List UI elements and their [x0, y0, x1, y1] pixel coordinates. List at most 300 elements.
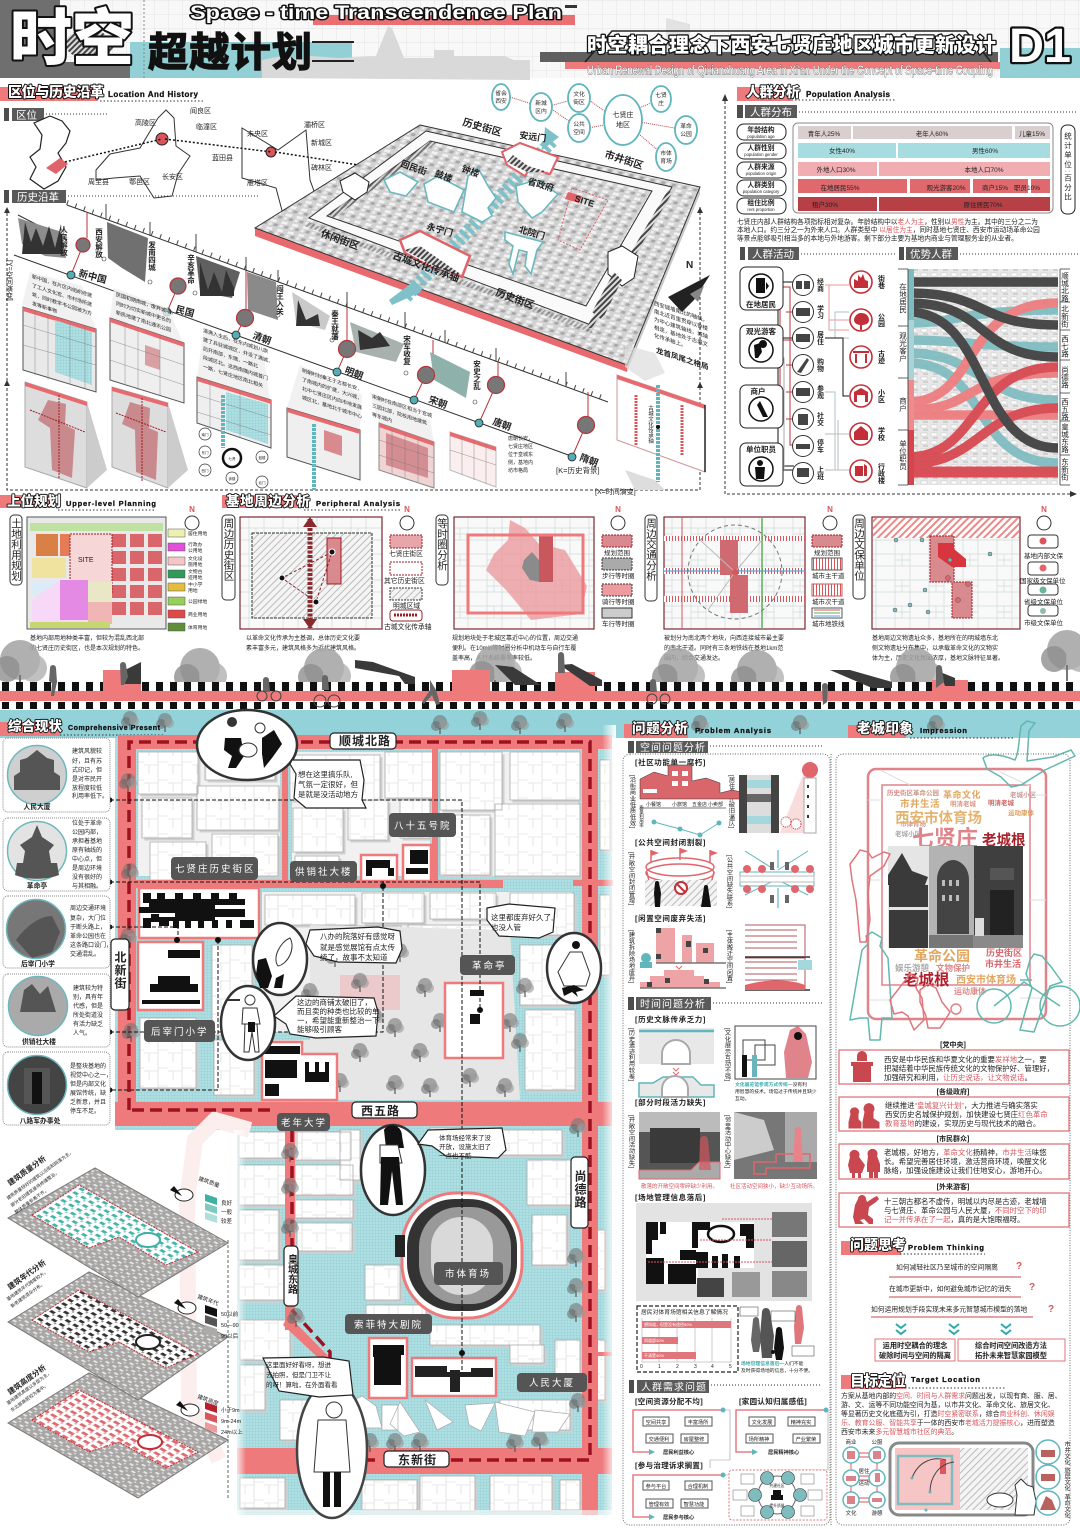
- building cards: 承担着基地: [72, 837, 102, 845]
- population labels: population age: [747, 134, 775, 139]
- section: heritage: [文化展示互动不强]: [724, 1028, 731, 1081]
- population labels: 人群来源: [747, 162, 775, 171]
- site map: 七贤庄历史街区: [175, 863, 256, 875]
- buildings: [138, 752, 610, 1511]
- park: [262, 925, 520, 1100]
- network diagram: 区内: [535, 107, 547, 115]
- function diagram: 文化: [845, 1509, 857, 1517]
- activity network: 上班: [816, 465, 824, 481]
- building cards: 别，具有年: [73, 993, 103, 1001]
- legend: heritage: 市级文保单位: [1024, 618, 1064, 627]
- heading: problem analysis: Problem Analysis: [695, 726, 771, 735]
- vertical title pills: 等时圈分析: [436, 517, 448, 571]
- layer legends: 50以前: [221, 1310, 239, 1318]
- map labels: 安远门: [519, 129, 547, 144]
- legend: historic blocks: 其它历史街区: [384, 576, 425, 585]
- subheading: activities: [740, 247, 897, 260]
- section: heritage: 互动。: [735, 1095, 749, 1102]
- stakeholder voices: [党中央]: [940, 1040, 966, 1049]
- building cards: 是整块基地的: [70, 1062, 106, 1070]
- timeline of history: 隋朝: [578, 452, 600, 469]
- layer legends: 较差: [221, 1217, 233, 1225]
- demand flows: 交通便利: [649, 1435, 669, 1443]
- outline figures: [850, 721, 1080, 1040]
- word cloud: 运动康体: [1008, 808, 1034, 817]
- land use legend: 居住用地: [188, 530, 207, 537]
- legend: historic blocks: [384, 535, 432, 631]
- pale building ground: [138, 752, 578, 1032]
- population labels: population origin: [746, 171, 777, 176]
- ring diagram: 七贤: [228, 456, 236, 461]
- heading: comprehensive present: [0, 718, 165, 736]
- chart: residents awareness: 1: [658, 1364, 661, 1370]
- tablet with word cloud: [868, 769, 1046, 1019]
- thinking questions: ?: [1016, 1261, 1022, 1272]
- activity network: 商户: [750, 386, 766, 396]
- heading: target location: [841, 1372, 1005, 1390]
- roads: [115, 735, 613, 1515]
- axis: space evolution: [4, 205, 703, 496]
- section: single function: [居住条件破旧逼仄]: [728, 775, 735, 828]
- demand flows: 丰富场所: [688, 1418, 708, 1426]
- era portraits: [71, 245, 586, 457]
- network diagram: 街区: [573, 98, 585, 106]
- vertical title pills: 土地利用规划: [10, 517, 22, 581]
- building cards: 利用率低下。: [72, 792, 108, 800]
- subheading: temporal problems: 时间问题分析: [640, 998, 706, 1010]
- note: dragon head phoenix tail: 龙首凤尾之格局: [656, 345, 709, 372]
- sankey chart: 西七路: [1060, 335, 1070, 358]
- historic map panels: 后开南部，东隅，一路北: [203, 344, 258, 370]
- axonometric layers: 部分老旧建筑亟待修缮整治，: [9, 1169, 61, 1209]
- note: dragon head phoenix tail: 化传承轴上。: [654, 331, 686, 349]
- layer legends: 建筑年代: [196, 1292, 220, 1308]
- location maps: 未央区: [247, 129, 268, 138]
- population stacked bars: 外地人口30%: [816, 165, 856, 174]
- site map: 革命亭: [472, 960, 507, 972]
- location maps: [30, 106, 365, 218]
- word cloud: 革命文化: [943, 789, 981, 800]
- building cards: 所处街道没: [73, 1011, 103, 1019]
- heading: problem thinking: 问题思考: [850, 1237, 906, 1253]
- stakeholder voices: 与七贤庄、革命公园与人民大厦，不同时空下的印: [884, 1206, 1047, 1215]
- stakeholder voices: 加强研究和利用，让历史说话，让文物说话。: [884, 1073, 1032, 1082]
- thinking questions: 如何减轻社区乃至城市的空间隔离: [896, 1262, 998, 1272]
- building cards: 展馆传统，缺: [70, 1089, 106, 1097]
- function diagram: [843, 1438, 885, 1517]
- activity network: [740, 267, 885, 486]
- sheet number: D1: [1009, 20, 1071, 73]
- target description: 乐、教育公服、智能共享于一体的西安市老城活力提振核心，进而塑造: [841, 1418, 1055, 1427]
- legend: heritage: 基地内部文保: [1024, 551, 1064, 560]
- network diagram: 七贤: [655, 91, 667, 99]
- land use legend: 文物古: [188, 568, 203, 575]
- stakeholder voices: [市民群众]: [937, 1134, 969, 1143]
- photo circles: [6, 746, 68, 1114]
- heading: peripheral analysis: 基地周边分析: [226, 493, 310, 509]
- network diagram: 公园: [680, 131, 692, 138]
- network diagram: 市体: [660, 149, 672, 157]
- section: closed public space: [开敞空间封闭管理]: [628, 852, 635, 905]
- ring diagram: 鼓楼: [258, 455, 266, 460]
- chart: residents awareness: 4: [711, 1364, 714, 1370]
- land use legend: 迹用地: [188, 574, 203, 581]
- background trees: [0, 630, 1080, 701]
- building cards: 八路军办事处: [20, 1116, 61, 1125]
- function diagram: 公服: [871, 1439, 883, 1446]
- subheading: distribution: 人群分布: [750, 106, 792, 118]
- stakeholder voices: 十三朝古都名不虚传，明城以内尽是古迹，老城墙: [884, 1197, 1047, 1206]
- panel: old town impression: [831, 720, 1080, 1525]
- target description: 方案从基地内部的空间、时间与人群需求问题出发，以现有商、服、居、: [841, 1391, 1062, 1400]
- building cards: 没有很好的: [72, 873, 102, 881]
- chart: residents awareness: 3: [694, 1364, 697, 1370]
- section: closed public space: [公共空间缺失联系]: [726, 855, 733, 908]
- building cards: 中心点，但: [72, 855, 102, 863]
- timeline of history: 宋军收复: [402, 334, 412, 366]
- site map: 能够吸引顾客: [297, 1024, 342, 1034]
- historic buildings highlighted: [138, 845, 503, 1100]
- section: idle time: 社区活动空间狭小，缺少互动场所。: [730, 1182, 818, 1190]
- legend: heritage: 国家级文保单位: [1020, 576, 1066, 585]
- people figures: [740, 1305, 814, 1374]
- population stacked bars: 男性60%: [972, 146, 998, 155]
- word cloud: 七贤庄: [912, 826, 978, 851]
- land use legend: 施用地: [188, 561, 203, 568]
- function diagram: 商业: [845, 1438, 857, 1446]
- population stacked bars: 观光游客20%: [926, 183, 966, 192]
- historic map panels: 同时为切实新城中更名的: [116, 299, 171, 325]
- map labels: 北院门: [517, 223, 546, 241]
- heading: impression: 老城印象: [857, 720, 914, 736]
- map captions: 侧文物遗址分布集中，以承载革命文化的文物实: [872, 644, 998, 652]
- map: transport: [664, 517, 805, 629]
- section: single function: [628, 757, 818, 838]
- target description: 游、文、运等不同功能空间为基，以市井文化、革命文化、旅居文化、: [841, 1400, 1055, 1409]
- stakeholder voices: 长。希望完善居住环境，激活营商环境，唤醒文化: [884, 1157, 1047, 1166]
- section: idle space: [主体搬迁空间闲置]: [726, 930, 733, 983]
- heading: upper level planning: [0, 493, 156, 510]
- building cards: 与其相融。: [72, 882, 102, 890]
- section: idle time: [628, 1097, 818, 1190]
- subheading: location: 区位: [16, 108, 37, 122]
- compass: [668, 260, 710, 312]
- person: waiter: [221, 986, 275, 1060]
- demand flows: 场所精神: [749, 1435, 769, 1443]
- building cards: 周边交通环境: [70, 904, 106, 912]
- historic map panels: 宋朝时在南部区相当于宫城: [372, 392, 432, 419]
- site map: 八十五号院: [394, 820, 452, 832]
- historic map panels: 清满入主后，在东内城划八旗: [203, 326, 268, 355]
- activity network: 街巷: [878, 274, 885, 289]
- land use legend: [168, 529, 207, 631]
- network diagram: 空间: [573, 128, 585, 136]
- place name labels: [144, 813, 587, 1392]
- stakeholder voices: 教育基地的建设，实现历史与现代技术的融合。: [885, 1119, 1040, 1128]
- map captions: 以革命文化传承为主基调，总体历史文化要: [246, 634, 360, 642]
- actor boxes: [740, 267, 783, 486]
- activity network: 购物: [816, 357, 824, 373]
- section: single function: [沿街商业低质低效]: [628, 775, 636, 828]
- people figures: 及时获得场地的信息，十分不便。: [741, 1367, 813, 1374]
- map labels: SITE: [573, 193, 596, 209]
- ring diagram: 南门: [202, 432, 209, 437]
- layer legends: 小于9m: [221, 1406, 240, 1414]
- note: dragon head phoenix tail: 为中心建筑轴线，城轴: [654, 315, 708, 341]
- heading: population analysis: 人群分析: [746, 84, 800, 100]
- activity network: 在地居民: [746, 299, 776, 309]
- map: heritage: [872, 517, 1020, 629]
- heading: population analysis: Population Analysis: [806, 90, 891, 99]
- person: visitor: [253, 923, 307, 995]
- building cards: 交通混乱。: [70, 950, 100, 958]
- population labels: population gender: [744, 152, 778, 157]
- site map: 八办的院落好有感觉呀: [320, 931, 395, 941]
- community ring diagram: 提升质量: [769, 1503, 785, 1508]
- heading: impression: Impression: [920, 726, 967, 735]
- road trees: [119, 773, 587, 1452]
- population stacked bars: 女性40%: [829, 146, 855, 155]
- network diagram: 新城: [535, 99, 547, 107]
- map captions: 基地周边文物遗址众多，基地所在的明城墙东北: [872, 634, 998, 642]
- population description: 等景点能够吸引相当多的本地与外地游客。剩下部分主要为基地内商业与管理服务业的从业者。: [737, 234, 1018, 242]
- heading: problem thinking: Problem Thinking: [908, 1243, 984, 1252]
- timeline of history: 辛亥革命: [186, 253, 196, 285]
- note: dragon head phoenix tail: [654, 299, 709, 372]
- stakeholder voices: 老城根，好地方，革命文化扬精神，市井生活味悠: [884, 1148, 1047, 1157]
- map panels row two: [25, 382, 188, 488]
- population stacked bars: 统计单位:百分比: [1063, 131, 1072, 203]
- timeline of history: 西安解放: [94, 228, 104, 259]
- map captions: 的七贤庄历史街区，也是本次规划的特色。: [30, 644, 144, 652]
- legend: heritage: [1020, 535, 1066, 627]
- activity network: 经商: [816, 277, 824, 293]
- community ring diagram: [729, 1470, 827, 1520]
- people figures: 场地管理信息落后—人们不能: [741, 1360, 804, 1367]
- edge fades: [115, 725, 616, 1520]
- map captions: [30, 634, 1004, 662]
- chart: residents awareness: 2: [676, 1364, 679, 1370]
- location maps: 临潼区: [196, 122, 217, 131]
- word cloud: 老城小区: [1010, 790, 1036, 799]
- map captions: 体为主，历史文化氛围浓厚，基地文脉特征显著。: [872, 654, 1004, 662]
- function diagram: 居住: [858, 1467, 870, 1475]
- frame: [623, 754, 830, 1525]
- activity network: 行政楼: [878, 462, 885, 485]
- timeline of history: 清朝: [251, 330, 273, 347]
- historic photos strip: [18, 218, 470, 398]
- section: single function: 小餐馆: [646, 801, 661, 808]
- site map: 就是感觉展馆有点太传: [320, 942, 395, 952]
- note: tang dynasty: 侧，基地内: [508, 459, 533, 466]
- location maps: 周至县: [88, 178, 109, 186]
- population stacked bars: [793, 123, 1075, 214]
- sub title: 超越计划: [148, 31, 312, 75]
- population stacked bars: 职员10%: [1014, 184, 1040, 192]
- population labels: 人群类别: [747, 180, 775, 189]
- population description: 七贤庄内部人群结构各项指标相对复杂。年龄结构中以老人为主，性别以男性为主。其中的三分之二为: [737, 217, 1038, 226]
- axonometric layers: 新老建筑混杂分布。: [9, 1280, 46, 1310]
- site map: 去拍照，但是门卫不让: [266, 1370, 332, 1379]
- historic map panels: 等东城内: [372, 410, 392, 424]
- axonometric layers: 基地建筑年代跨度较大，: [5, 1268, 49, 1303]
- word cloud: 老城根: [903, 970, 950, 989]
- heading: peripheral analysis: Peripheral Analysis: [316, 499, 400, 508]
- ring diagram: 东门: [202, 450, 209, 455]
- timeline of history: 安史之乱: [472, 359, 482, 391]
- stakeholder voices: 西安历史名城保护规划，加快建设七贤庄红色革命: [885, 1110, 1048, 1119]
- site map: 供销社大楼: [295, 866, 353, 878]
- panel: upper level and peripheral analysis: N: [615, 505, 621, 514]
- layer legends: [196, 1174, 243, 1436]
- culture axis: [389, 127, 559, 305]
- word cloud: 明清老城: [988, 798, 1014, 807]
- map captions: 的南北干道。同时有三条地铁线在基地1km范: [664, 644, 783, 652]
- note: tang dynasty: 七贤庄地区: [508, 443, 533, 450]
- map panels row one: [23, 307, 496, 488]
- note: dragon head phoenix tail: 西安城墙南北的轴线，: [654, 299, 708, 324]
- thinking questions: 拓扑未来智慧家园模型: [975, 1351, 1047, 1360]
- building cards: 乏新意，并且: [70, 1098, 106, 1106]
- site map: 顺城北路: [339, 733, 391, 748]
- building cards: 建筑较为特: [73, 984, 103, 992]
- chart: residents awareness: 居民对体育场馆相关信息了解情况: [641, 1308, 728, 1316]
- person: band: [197, 710, 297, 780]
- heading: problem analysis: [624, 720, 771, 738]
- location maps: 新城区: [311, 138, 332, 147]
- subheading: temporal problems: [628, 997, 822, 1010]
- map captions: 围内，综合交通发达。: [664, 654, 724, 662]
- dragon phoenix map: [617, 345, 705, 490]
- ring diagram: 钟楼: [228, 476, 236, 481]
- thinking questions: [871, 1261, 1065, 1361]
- heading: comprehensive present: Comprehensive Present: [68, 725, 161, 732]
- section: idle space: [628, 913, 812, 990]
- site map: 市体育场: [445, 1268, 491, 1280]
- activity network: 停车: [816, 438, 824, 454]
- land use legend: 中小学: [188, 581, 203, 588]
- layer legends: 建筑高度: [196, 1392, 220, 1408]
- land use legend: 文化设: [188, 555, 203, 562]
- main title: 时空: [10, 5, 134, 74]
- site map: [108, 710, 616, 1520]
- chart: residents awareness: 0: [640, 1364, 643, 1370]
- vertical title pills: 周边交通分析: [645, 518, 657, 582]
- layer: building quality: [8, 1168, 228, 1297]
- word cloud: 明清老城: [950, 799, 976, 808]
- note: dragon head phoenix tail: 南北近百里贯穿以钟楼: [654, 307, 708, 333]
- ring diagram: [199, 395, 314, 490]
- legend: heritage: 省级文保单位: [1024, 597, 1064, 606]
- theatre and tower: [350, 1338, 570, 1436]
- site map: 尚德路: [573, 1169, 587, 1209]
- person: tourist with coat: [297, 1382, 367, 1518]
- site map: 索菲特大剧院: [354, 1319, 423, 1331]
- note: tang dynasty: 唐朝长安，: [508, 435, 533, 442]
- word cloud: 运动康体: [954, 986, 986, 996]
- demand flows: [633, 1396, 828, 1521]
- target description: [841, 1391, 1062, 1436]
- population labels: 年龄结构: [747, 125, 775, 134]
- site map: 的呀！算啦，在外面看看: [266, 1380, 338, 1389]
- network diagram: 育场: [660, 157, 672, 165]
- word cloud: 市井生活: [985, 958, 1021, 969]
- subheading: spatial problems: [628, 741, 822, 754]
- site map: 东新街: [398, 1452, 437, 1467]
- network diagram: 西安: [495, 97, 507, 105]
- population labels: 租住比例: [747, 198, 775, 207]
- culture icons: 革命文化: [1063, 1493, 1070, 1519]
- timeline of history: 新中国: [77, 267, 108, 286]
- historic map panels: 了工人文化宫、市村场所建: [32, 281, 92, 308]
- chart: residents awareness: 5: [729, 1364, 732, 1370]
- section: idle time: [邻里活动中心缺失]: [724, 1115, 731, 1168]
- map labels: 回民街: [399, 158, 428, 177]
- building cards: 代感，但是: [73, 1002, 103, 1010]
- section: single function: 小旅馆: [672, 801, 687, 808]
- chart: residents awareness: 知道部30%: [644, 1337, 664, 1343]
- map captions: 被划分为南北两个地块，向西连接城市最主要: [664, 634, 784, 642]
- sankey chart: 北新街: [1060, 305, 1070, 329]
- panel: upper level and peripheral analysis: N: [1041, 505, 1047, 514]
- population stacked bars: 租户30%: [812, 200, 838, 209]
- network diagram: 七贤庄: [612, 110, 634, 119]
- population stacked bars: 商户15%: [982, 183, 1008, 192]
- subheading: dominant groups: [899, 247, 1078, 260]
- word cloud: 革命公园: [914, 948, 970, 964]
- stakeholder voices: [839, 1040, 1069, 1227]
- map: isochrones: [454, 517, 594, 629]
- land use legend: 体育用地: [188, 624, 207, 631]
- activity icons: [792, 274, 814, 484]
- activity network: 学习: [816, 304, 824, 320]
- road name pills: [111, 733, 588, 1467]
- population labels: 人群性别: [747, 143, 775, 152]
- population stacked bars: 本地人口70%: [964, 165, 1004, 174]
- section: idle space: [闲置空间废弃失活]: [635, 913, 706, 923]
- timeline of history: 宋朝: [427, 394, 449, 411]
- timeline of history: 人民解放: [59, 226, 68, 257]
- activity network: 学校: [878, 426, 885, 442]
- sankey chart: 单位职员: [898, 439, 908, 471]
- building cards: 人民大厦: [23, 802, 51, 811]
- site map: 气氛一定很好，但: [298, 779, 358, 789]
- section: site management: [场地管理信息落后]: [635, 1192, 706, 1202]
- map labels: 休闲街区: [319, 227, 361, 252]
- population stacked bars: 在地居民55%: [820, 183, 860, 192]
- location maps: 高陵区: [135, 118, 156, 127]
- section: single function: [社区功能单一腐朽]: [635, 757, 706, 767]
- demand flows: 房屋整修: [684, 1435, 705, 1443]
- legend: isochrones: 骑行等时圈: [602, 597, 634, 606]
- location maps: 碑林区: [311, 163, 332, 172]
- map labels: 省政府: [526, 175, 555, 193]
- building cards: 但是内部文化: [70, 1080, 106, 1088]
- section: heritage: 文化展览馆参观方式传统—没有利: [735, 1081, 807, 1088]
- timeline of history: 明朝: [343, 365, 365, 382]
- word cloud: 历史街区: [887, 788, 914, 797]
- demand flows: [空间资源分配不均]: [635, 1396, 703, 1406]
- frame: [831, 754, 1070, 1525]
- heading: upper level planning: 上位规划: [7, 493, 61, 509]
- person: sitting man: [547, 933, 601, 1003]
- map captions: 规划地块处于老城区靠近中心的位置，周边交通: [452, 634, 578, 642]
- target description: 等显著历史文化底蕴为引，打造时空紧密联系，综合商业科创、休闲娱: [841, 1409, 1055, 1418]
- historic map panels: 新民地建了南北通讯公园: [116, 308, 171, 334]
- panel: location and history: [0, 84, 710, 496]
- word cloud: 市体育场: [900, 819, 926, 828]
- stakeholder voices: 记一并传承在了一起，真的是大饱眼福呀。: [884, 1215, 1024, 1224]
